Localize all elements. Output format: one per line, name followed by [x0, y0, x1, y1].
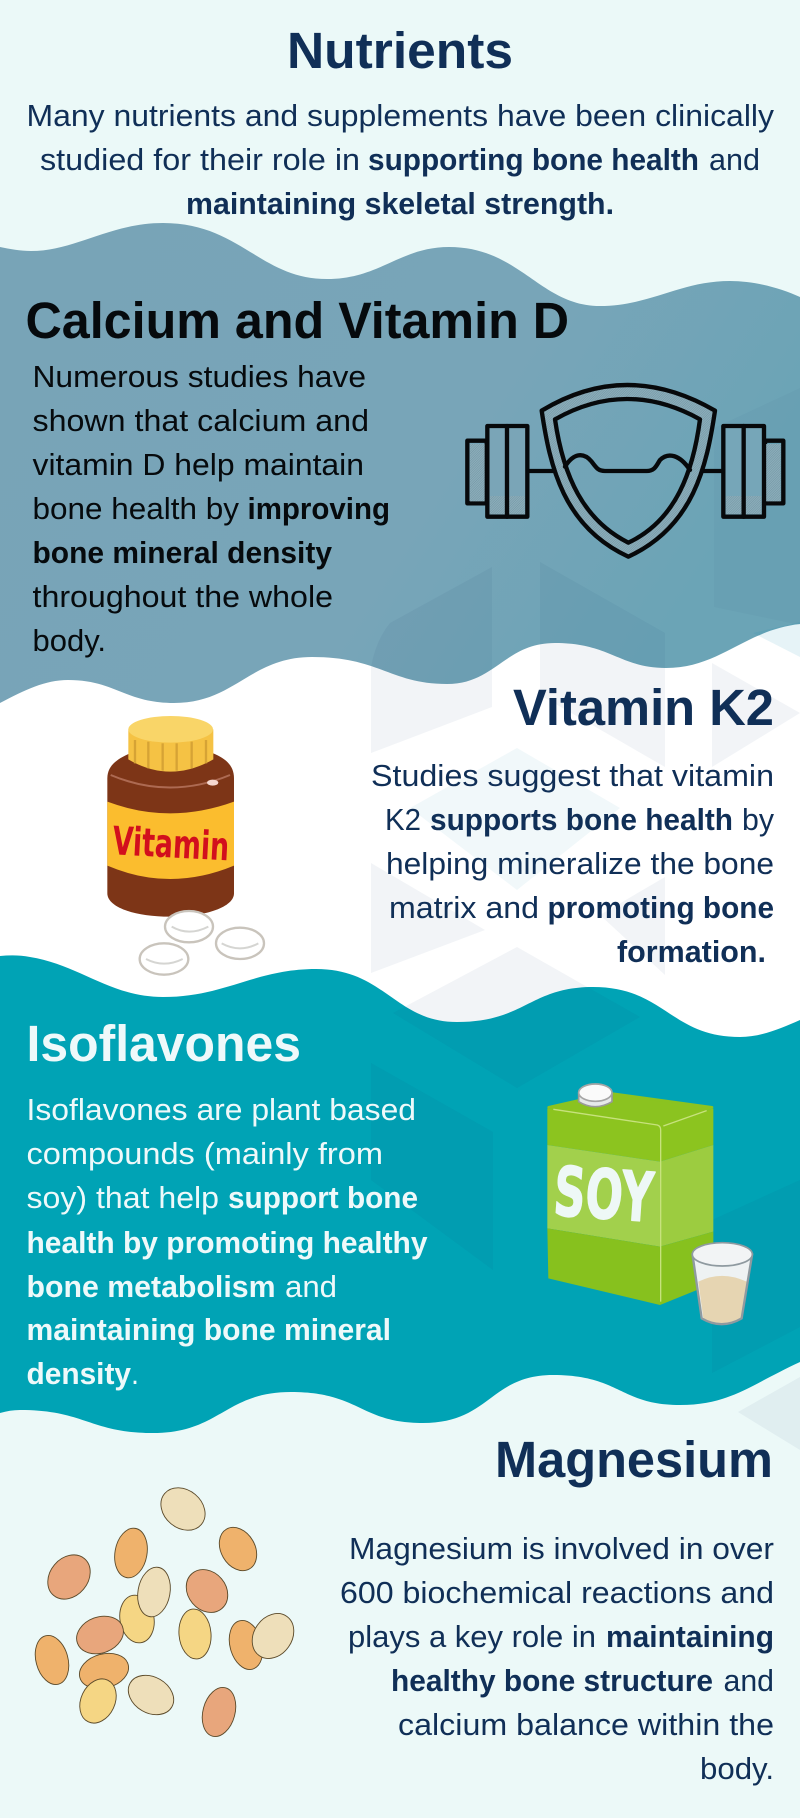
text block: vitamin K2: supports bone health	[430, 802, 733, 837]
text block: magnesium: and	[724, 1663, 774, 1698]
text block: vitamin K2: K2	[385, 802, 421, 837]
text block: calcium and vitamin D	[32, 359, 390, 658]
text block: vitamin K2: formation.	[617, 934, 766, 969]
text block: calcium and vitamin D: throughout the whole	[32, 579, 333, 614]
text block: isoflavones: and	[285, 1269, 337, 1304]
text block: vitamin K2: matrix and	[389, 890, 539, 925]
text block: magnesium: healthy bone structure	[391, 1663, 713, 1698]
text block: calcium and vitamin D: shown that calcium and	[32, 403, 369, 438]
text block: isoflavones: support bone	[228, 1180, 418, 1215]
icon: vitamin bottle with tablets: Vitamin	[111, 818, 230, 870]
text block: calcium and vitamin D: body.	[32, 623, 106, 658]
intro text block: maintaining skeletal strength.	[186, 186, 614, 221]
intro text block: studied for their role in	[40, 142, 360, 177]
intro text block: Many nutrients and supplements have been clinically	[26, 98, 775, 133]
text block: magnesium	[340, 1531, 774, 1786]
text block: magnesium: Magnesium is involved in over	[349, 1531, 774, 1566]
panel: vitamin K2 wave band	[0, 624, 800, 1060]
heading: magnesium: Magnesium	[495, 1431, 773, 1488]
text block: vitamin K2: helping mineralize the bone	[386, 846, 774, 881]
text block: isoflavones: Isoflavones are plant based	[26, 1092, 416, 1127]
icon: vitamin bottle with tablets	[107, 716, 264, 975]
title: Nutrients	[287, 22, 513, 79]
icon: soy milk carton with glass	[547, 1084, 752, 1324]
intro text block	[26, 98, 775, 221]
text block: calcium and vitamin D: vitamin D help maintain	[32, 447, 364, 482]
icon: dumbbell with shield	[467, 385, 783, 557]
text block: magnesium: maintaining	[606, 1619, 774, 1654]
heading: vitamin K2: Vitamin K2	[513, 679, 774, 736]
text block: isoflavones	[26, 1092, 428, 1391]
text block: magnesium: calcium balance within the	[398, 1707, 774, 1742]
text block: isoflavones: .	[131, 1356, 139, 1391]
text block: isoflavones: bone metabolism	[26, 1269, 276, 1304]
text block: magnesium: plays a key role in	[348, 1619, 596, 1654]
intro text block: supporting bone health	[368, 142, 699, 177]
text block: isoflavones: health by promoting healthy	[26, 1225, 428, 1260]
text block: isoflavones: compounds (mainly from	[26, 1136, 383, 1171]
icon: magnesium seeds	[30, 1479, 302, 1740]
text block: vitamin K2: Studies suggest that vitamin	[371, 758, 774, 793]
panel: calcium and vitamin D wave band	[0, 223, 800, 720]
text block: vitamin K2: promoting bone	[548, 890, 774, 925]
background hexagon pattern	[371, 388, 800, 1450]
text block: vitamin K2: by	[742, 802, 774, 837]
text block: vitamin K2	[371, 758, 774, 969]
text block: isoflavones: density	[26, 1356, 132, 1391]
text block: magnesium: body.	[700, 1751, 774, 1786]
text block: calcium and vitamin D: Numerous studies have	[32, 359, 366, 394]
panel: magnesium wave band	[0, 1362, 800, 1818]
heading: isoflavones: Isoflavones	[26, 1015, 301, 1072]
text block: calcium and vitamin D: improving	[248, 491, 390, 526]
intro text block: and	[709, 142, 760, 177]
text block: calcium and vitamin D: bone health by	[32, 491, 239, 526]
heading: calcium and vitamin D: Calcium and Vitamin D	[26, 292, 569, 349]
text block: calcium and vitamin D: bone mineral density	[32, 535, 333, 570]
icon: soy milk carton with glass: SOY	[551, 1153, 657, 1239]
text block: isoflavones: maintaining bone mineral	[26, 1312, 391, 1347]
panel: isoflavones wave band	[0, 955, 800, 1440]
text block: isoflavones: soy) that help	[26, 1180, 219, 1215]
text block: magnesium: 600 biochemical reactions and	[340, 1575, 774, 1610]
